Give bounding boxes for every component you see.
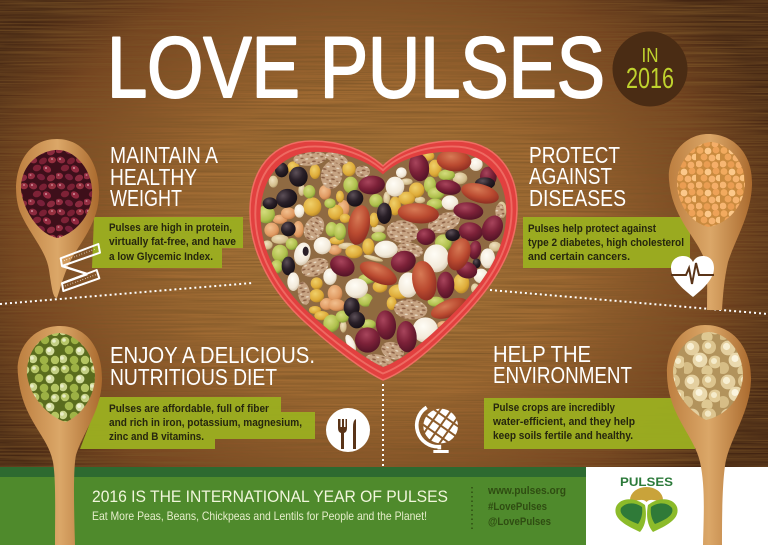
text: environment description: keep soils fertile and healthy. [493,430,633,442]
text: diet description: Pulses are affordable, full of fiber [109,403,270,415]
text: diet description [109,403,302,443]
heading: protect against diseases: AGAINST [529,163,612,189]
text: healthy weight description [109,222,236,263]
heading: protect against diseases [529,142,626,211]
footer contact links: #LovePulses [488,501,547,513]
heading: enjoy a delicious nutritious diet [110,342,315,390]
heading: maintain a healthy weight: MAINTAIN A [110,142,219,168]
heart bowl of beans [250,141,517,380]
spoon: split green peas [18,326,102,545]
heading: help the environment: ENVIRONMENT [493,362,632,388]
panel: healthy weight text box [92,217,243,268]
heading: enjoy a delicious nutritious diet: ENJOY A DELICIOUS. [110,342,315,368]
panel: environment text box [484,398,695,449]
text: diseases description: Pulses help protect against [528,223,656,235]
footer contact links [487,485,566,528]
heading: enjoy a delicious nutritious diet: NUTRITIOUS DIET [110,364,277,390]
heading: help the environment [493,341,632,388]
title: LOVE PULSES [107,20,605,116]
footer band [0,467,768,545]
icon: fork and knife [326,408,370,452]
text: healthy weight description: Pulses are high in protein, [109,222,232,234]
panel: diet text box [80,397,315,449]
heading: maintain a healthy weight: WEIGHT [110,185,182,211]
heading: maintain a healthy weight: HEALTHY [110,164,197,190]
text: environment description [492,402,635,442]
heading: protect against diseases: PROTECT [529,142,620,168]
icon: heart with pulse [671,256,714,297]
dotted divider vertical [382,384,384,466]
heading: maintain a healthy weight [110,142,219,211]
text: environment description: Pulse crops are incredibly [493,402,616,414]
icon: globe [414,406,458,453]
text: healthy weight description: virtually fat-free, and have [109,236,236,248]
text: diseases description: type 2 diabetes, high cholesterol [528,237,684,249]
footer tagline: Eat More Peas, Beans, Chickpeas and Lentils for People and the Planet! [92,509,427,523]
heading: help the environment: HELP THE [493,341,591,367]
logo: pulses [615,475,678,532]
text: environment description: water-efficient, and they help [492,416,635,428]
logo: pulses: PULSES [620,475,673,489]
badge: in 2016: 2016 [626,63,674,95]
spoon: red lentils [669,134,752,310]
heading: protect against diseases: DISEASES [529,185,626,211]
footer heading: 2016 IS THE INTERNATIONAL YEAR OF PULSES [92,487,448,506]
footer contact links: www.pulses.org [487,485,566,497]
text: diet description: and rich in iron, potassium, magnesium, [109,417,302,429]
icon: measuring tape [61,244,100,291]
spoon: adzuki beans [16,139,99,298]
badge: in 2016: IN [642,45,658,67]
dotted divider right [490,290,768,314]
spoon: chickpeas [667,325,751,545]
text: healthy weight description: a low Glycemic Index. [109,251,213,263]
panel: diseases text box [523,217,690,268]
footer dotted separator [471,487,473,531]
text: diet description: zinc and B vitamins. [109,431,204,443]
text: diseases description [528,223,684,263]
text: diseases description: and certain cancers. [528,251,630,263]
footer contact links: @LovePulses [488,516,551,528]
badge: in 2016 [612,32,688,106]
dotted divider left [0,283,252,304]
